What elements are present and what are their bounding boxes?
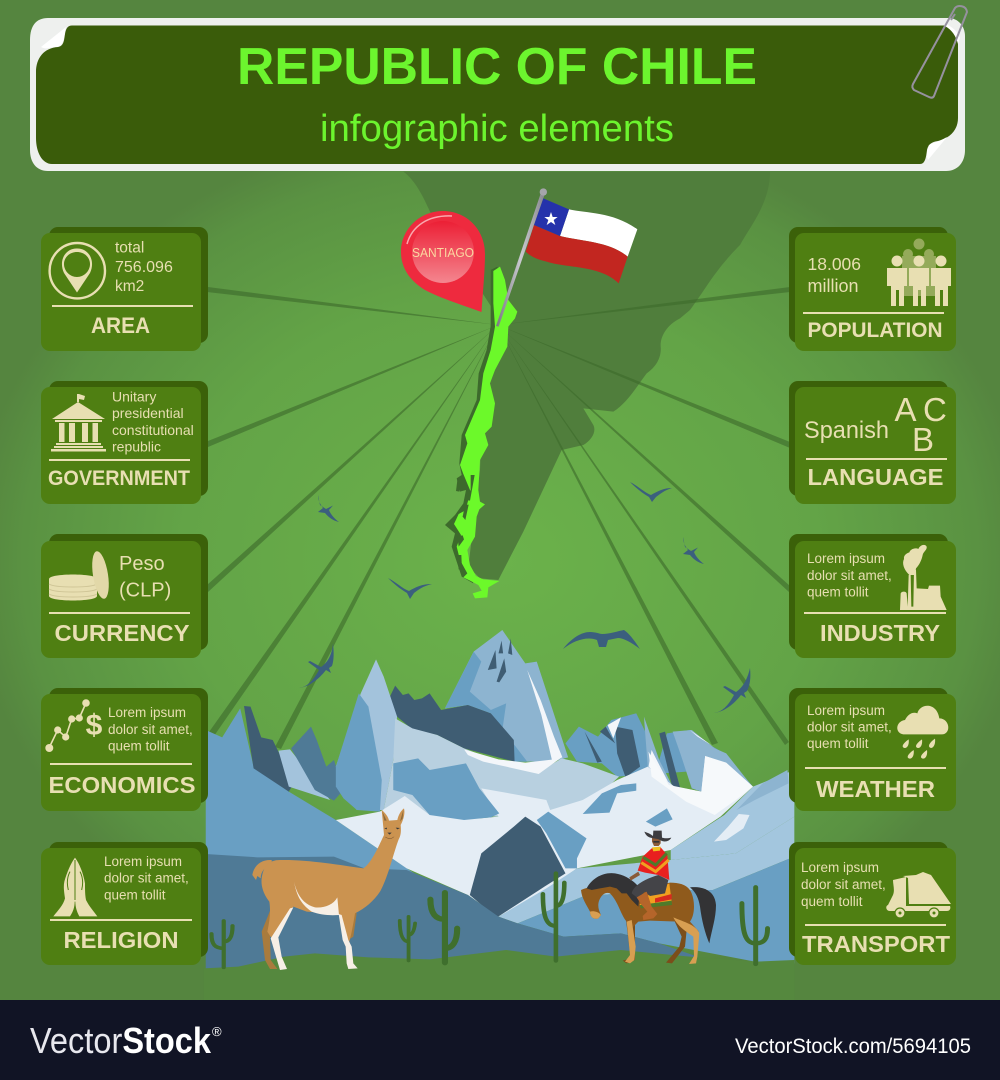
horse body xyxy=(581,877,699,932)
icon: rain cloud xyxy=(897,706,948,759)
cactus 3 xyxy=(430,893,457,963)
snow streak xyxy=(714,814,750,842)
religion label: RELIGION xyxy=(64,927,178,953)
horse mane xyxy=(587,873,640,907)
transport text: Lorem ipsum xyxy=(801,860,879,875)
bird xyxy=(630,482,672,502)
ground xyxy=(204,950,794,1000)
rider arm xyxy=(629,872,640,881)
icon: letters ABC: C xyxy=(923,391,947,428)
industry text: Lorem ipsum xyxy=(807,551,885,566)
transport text: quem tollit xyxy=(801,894,863,909)
horse muzzle xyxy=(590,911,601,919)
rider boot xyxy=(637,892,657,920)
title: REPUBLIC OF CHILE xyxy=(237,38,757,96)
government label: GOVERNMENT xyxy=(48,467,190,490)
icon: factory xyxy=(900,545,947,610)
currency text: (CLP) xyxy=(119,580,171,602)
guanaco xyxy=(252,808,404,970)
icon: location pin xyxy=(50,243,105,298)
cactus 5 xyxy=(742,887,768,964)
area value: km2 xyxy=(115,278,144,295)
population label: POPULATION xyxy=(808,319,942,342)
dark rock outcrop xyxy=(470,817,565,918)
foreground slate hills xyxy=(206,854,698,970)
economics text: dolor sit amet, xyxy=(108,722,193,737)
economics text: quem tollit xyxy=(108,738,170,754)
belly xyxy=(294,882,339,915)
horse light legs xyxy=(625,917,699,964)
icon: praying hands xyxy=(53,858,97,916)
right peaks xyxy=(565,713,753,787)
panel: industry xyxy=(789,534,956,658)
industry text: dolor sit amet, xyxy=(807,568,892,583)
weather text: quem tollit xyxy=(807,736,869,751)
cactus 2 xyxy=(400,917,415,961)
area value: total xyxy=(115,240,144,256)
panel: language xyxy=(789,381,956,504)
panel: government xyxy=(41,381,208,504)
ear inner xyxy=(382,810,403,822)
blue ice field xyxy=(393,758,499,820)
lower light band xyxy=(499,817,794,923)
dark jagged range xyxy=(388,686,515,762)
population value: 18.006 xyxy=(808,254,861,274)
pillar shade xyxy=(336,693,382,812)
cactus 1 xyxy=(211,921,233,967)
saddle blanket xyxy=(639,883,672,905)
bird xyxy=(299,643,334,688)
icon: letters ABC: B xyxy=(912,421,934,458)
language label: LANGUAGE xyxy=(808,464,944,490)
banner paper xyxy=(30,18,965,171)
industry label: INDUSTRY xyxy=(820,620,940,646)
header banner xyxy=(30,6,967,171)
bird xyxy=(388,578,432,599)
right slope xyxy=(671,770,794,860)
rider poncho xyxy=(638,847,669,880)
bird xyxy=(714,668,750,713)
main peak xyxy=(445,630,568,762)
icon: growth chart: $ xyxy=(86,709,103,742)
icon: people xyxy=(887,238,951,306)
rider hat xyxy=(644,831,671,841)
lower blue slope xyxy=(518,857,794,963)
bright snow patch xyxy=(649,752,753,815)
Chilean flag xyxy=(496,188,637,327)
government text: constitutional xyxy=(112,422,194,438)
main peak shade xyxy=(445,652,527,762)
subtitle: infographic elements xyxy=(320,108,674,150)
icon: coins xyxy=(49,550,112,600)
panel: area xyxy=(41,227,208,351)
panel: weather xyxy=(789,688,956,811)
icon: growth chart xyxy=(45,699,103,752)
rays from Santiago to panels xyxy=(207,287,790,749)
religion text: dolor sit amet, xyxy=(104,870,189,886)
panel: currency xyxy=(41,534,208,658)
footer logo: VectorStock xyxy=(30,1020,212,1061)
right peak dark rock xyxy=(585,727,680,788)
pale ridge xyxy=(278,749,330,800)
paperclip xyxy=(912,6,967,98)
footer band xyxy=(0,1000,1000,1080)
city pin: Santiago xyxy=(401,211,485,312)
blue patches xyxy=(583,783,673,827)
religion text: quem tollit xyxy=(104,888,166,902)
footer url: VectorStock.com/5694105 xyxy=(735,1035,971,1058)
area value: 756.096 xyxy=(115,259,173,276)
banner dark panel xyxy=(36,26,958,164)
icon: dump truck xyxy=(886,872,951,918)
flag pole xyxy=(496,192,545,327)
horse and rider xyxy=(581,831,716,964)
cactus 4 xyxy=(543,873,564,961)
government text: Unitary xyxy=(112,388,156,404)
slate peak xyxy=(291,727,344,801)
currency label: CURRENCY xyxy=(54,620,190,646)
main peak white streak xyxy=(527,670,562,761)
Chile land xyxy=(454,267,517,598)
rider head xyxy=(652,836,661,846)
population value: million xyxy=(808,276,859,296)
icon: letters ABC: A xyxy=(894,391,917,428)
panel: economics xyxy=(41,688,208,811)
cactus xyxy=(211,873,768,967)
tail xyxy=(252,860,272,880)
far left slope xyxy=(206,708,414,873)
blue rock face xyxy=(537,812,587,868)
city pin: Santiago: SANTIAGO xyxy=(412,246,474,260)
registered mark: ® xyxy=(212,1024,222,1039)
weather text: dolor sit amet, xyxy=(807,720,892,734)
mountain scene xyxy=(204,630,794,1000)
rider trousers xyxy=(632,875,668,897)
weather label: WEATHER xyxy=(816,776,935,802)
snow band upper xyxy=(384,718,619,817)
bird xyxy=(318,495,339,522)
panel: religion xyxy=(41,842,208,965)
island channel marks xyxy=(456,475,475,570)
right peak highlights xyxy=(644,717,751,792)
religion text: Lorem ipsum xyxy=(104,854,182,869)
transport text: dolor sit amet, xyxy=(801,877,886,892)
area label: AREA xyxy=(91,313,150,338)
curled corners xyxy=(41,24,960,160)
white ledge xyxy=(464,749,562,774)
birds xyxy=(299,482,750,713)
bird xyxy=(683,537,704,564)
Chile shadow xyxy=(445,267,505,583)
economics label: ECONOMICS xyxy=(48,772,195,798)
tall pillar xyxy=(336,659,397,810)
horse far legs xyxy=(623,918,687,963)
dark crag left xyxy=(244,706,294,792)
icon: government building xyxy=(51,394,106,452)
horse tail xyxy=(690,887,716,943)
weather text: Lorem ipsum xyxy=(807,703,885,718)
government text: republic xyxy=(112,438,161,454)
industry text: quem tollit xyxy=(807,584,869,600)
bird xyxy=(563,630,640,649)
right peak snow xyxy=(608,717,713,783)
body xyxy=(261,808,404,942)
transport label: TRANSPORT xyxy=(802,931,950,957)
economics text: Lorem ipsum xyxy=(108,705,186,720)
map: South America silhouette xyxy=(403,172,770,580)
far legs xyxy=(262,907,357,969)
currency text: Peso xyxy=(119,553,165,575)
peak crevices xyxy=(488,638,512,682)
main snowfield xyxy=(288,756,753,917)
language text: Spanish xyxy=(804,417,889,444)
white legs xyxy=(271,907,358,970)
face xyxy=(384,828,400,835)
Chile country map xyxy=(445,267,517,598)
panel: population xyxy=(789,227,956,351)
government text: presidential xyxy=(112,405,184,421)
panel: transport xyxy=(789,842,956,965)
